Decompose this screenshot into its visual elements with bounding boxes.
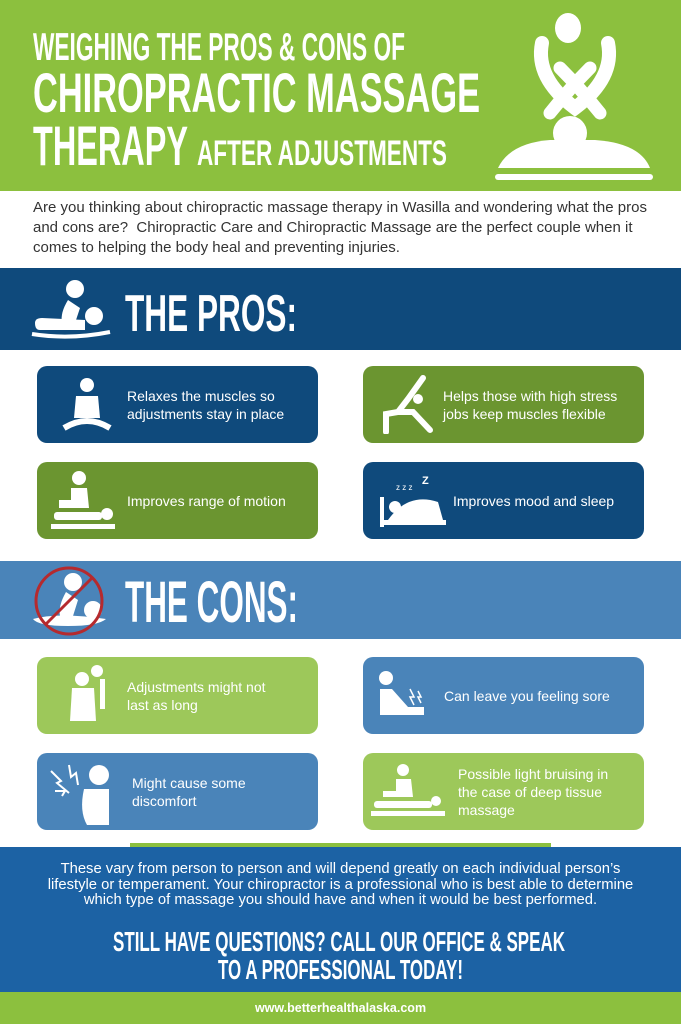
cons card 1: last as long [127,696,198,712]
cons card 4: the case of deep tissue [458,784,602,800]
icon: adjustment [70,665,105,721]
title: THERAPY [33,114,188,177]
pros card 2 [363,366,644,443]
icon: massage [32,280,110,339]
cons card 4: Possible light bruising in [458,766,608,782]
icon: sleep: z z z [396,483,412,492]
icon: discomfort [50,764,109,825]
footer paragraph: These vary from person to person and will depend greatly on each individual person’s [61,861,620,877]
icon: massage hero [495,13,653,180]
cons card 3: discomfort [132,792,197,808]
header band [0,0,681,191]
divider [130,843,551,847]
footer paragraph [48,861,633,908]
icon: stretch [383,375,433,434]
intro text: Are you thinking about chiropractic massage therapy in Wasilla and wondering what the pros and cons are? Chiropractic Care and Chiropractic Massage are the perfect couple when it comes to helping the body heal and preventing injuries. [33,199,647,256]
icon: no massage [33,566,106,636]
cons card 4: massage [458,802,515,818]
cons card 2 [363,657,644,734]
pros card 4 [363,462,644,539]
pros card 4: Improves mood and sleep [453,492,614,508]
footer paragraph: which type of massage you should have and when it would be best performed. [84,892,597,908]
pros card 2: jobs keep muscles flexible [443,406,606,422]
pros card 2: Helps those with high stress [443,388,617,404]
cons card 4 [363,753,644,830]
cons card 3: Might cause some [132,774,246,790]
cons card 1: Adjustments might not [127,678,266,694]
icon: deep tissue [371,764,445,816]
icon: meditation [62,378,112,431]
footer url [0,992,681,1024]
footer band [0,847,681,992]
icon: sleep: Z [422,475,429,487]
pros card 3 [37,462,318,539]
cons card 2: Can leave you feeling sore [444,688,610,704]
cons card 1 [37,657,318,734]
cons band [0,561,681,639]
icon: therapist [51,471,115,529]
icon: sore [379,671,424,715]
footer url: www.betterhealthalaska.com [255,1001,426,1015]
call to action [113,926,565,985]
pros card 1: Relaxes the muscles so [127,388,275,404]
pros band [0,268,681,350]
pros card 1 [37,366,318,443]
footer paragraph: lifestyle or temperament. Your chiropractor is a professional who is best able to determine [48,876,633,892]
call to action: TO A PROFESSIONAL TODAY! [218,954,463,985]
pros card 3: Improves range of motion [127,492,286,508]
title [33,26,480,177]
pros card 1: adjustments stay in place [127,406,284,422]
cons card 3 [37,753,318,830]
icon: sleep [380,475,446,527]
